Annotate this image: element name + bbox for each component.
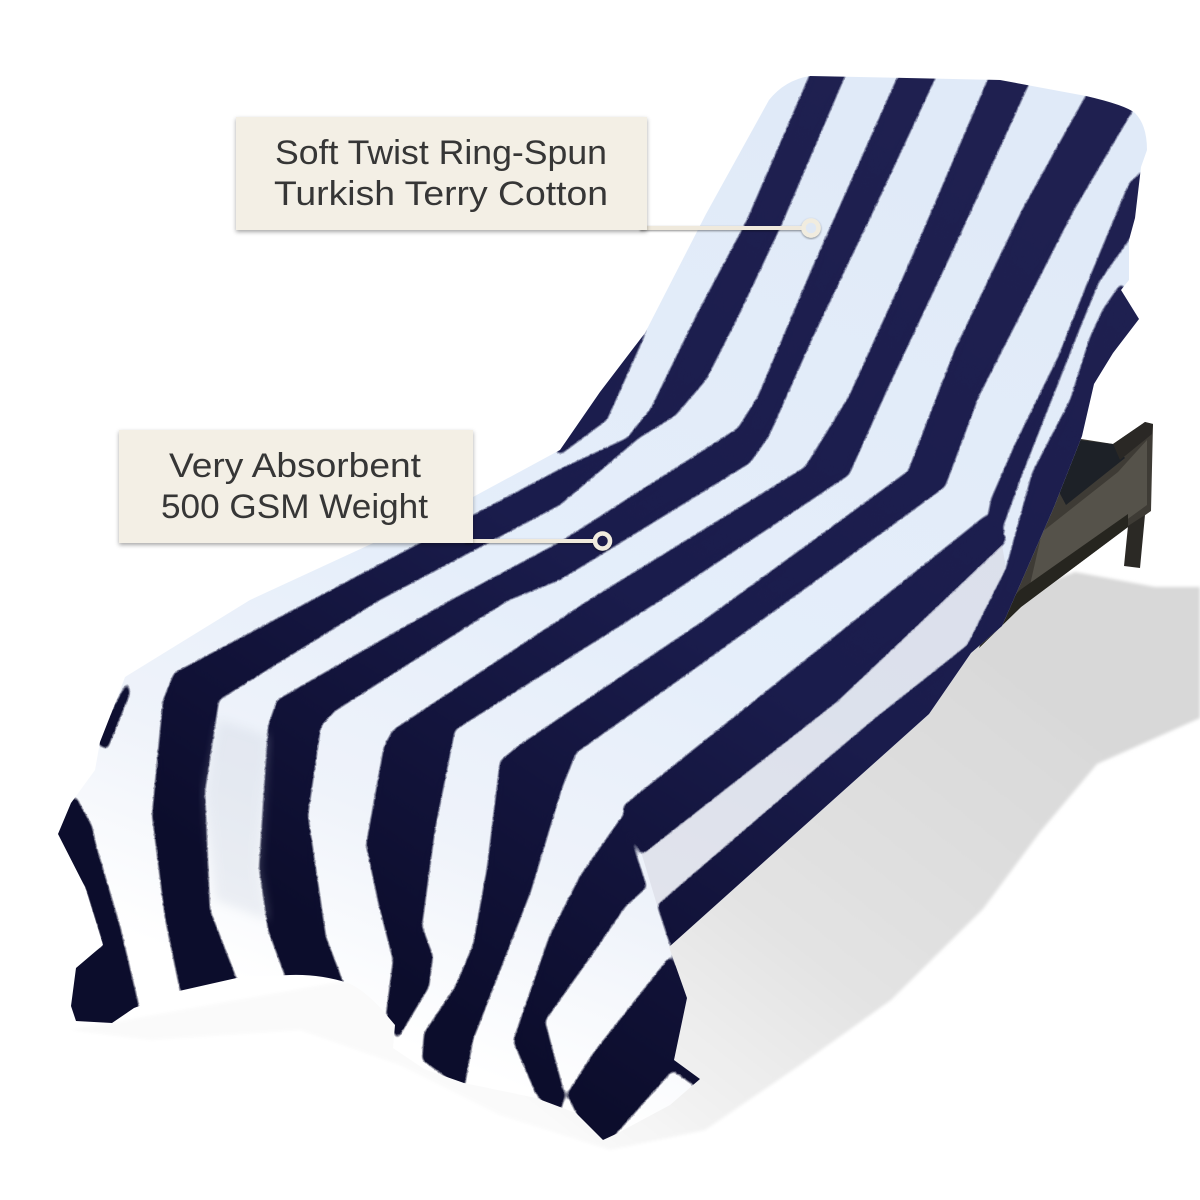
lounger leg [1124, 515, 1145, 568]
label box [236, 117, 647, 230]
lounger dark inner seat [1058, 440, 1125, 505]
callout: absorbent weight [119, 430, 610, 548]
label text: Soft Twist Ring-Spun [275, 134, 607, 172]
side panel stripe [623, 515, 1006, 855]
callout: soft twist cotton [236, 117, 818, 236]
connector line and marker [640, 220, 818, 236]
lounger top rim [1113, 422, 1153, 460]
towel end edge [669, 1063, 700, 1086]
stripe B [259, 60, 944, 1000]
backrest lower side stripe [657, 283, 1150, 960]
front left fold [95, 680, 130, 750]
label box [119, 430, 473, 543]
towel front shading [205, 720, 268, 920]
side panel shading [642, 545, 1006, 905]
lounger side panel [979, 422, 1153, 648]
label text: 500 GSM Weight [161, 488, 429, 526]
backrest side stripe [988, 160, 1155, 527]
front left drape [58, 797, 140, 1023]
label text [161, 447, 429, 526]
stripe D [422, 70, 1145, 1090]
label text: Very Absorbent [169, 447, 422, 485]
lounger frame [979, 422, 1153, 648]
corner drape stripe F [562, 954, 687, 1140]
floor shadow [70, 572, 1200, 1150]
backrest left flap [556, 328, 648, 455]
stripe A [152, 60, 852, 1005]
lounger lower rail [979, 514, 1128, 648]
stripe C [366, 60, 1040, 1040]
lounger weave highlight [1030, 440, 1147, 585]
connector line and marker [465, 534, 610, 548]
label text [274, 134, 608, 213]
corner drape stripe E [513, 815, 647, 1120]
label text: Turkish Terry Cotton [274, 175, 608, 213]
